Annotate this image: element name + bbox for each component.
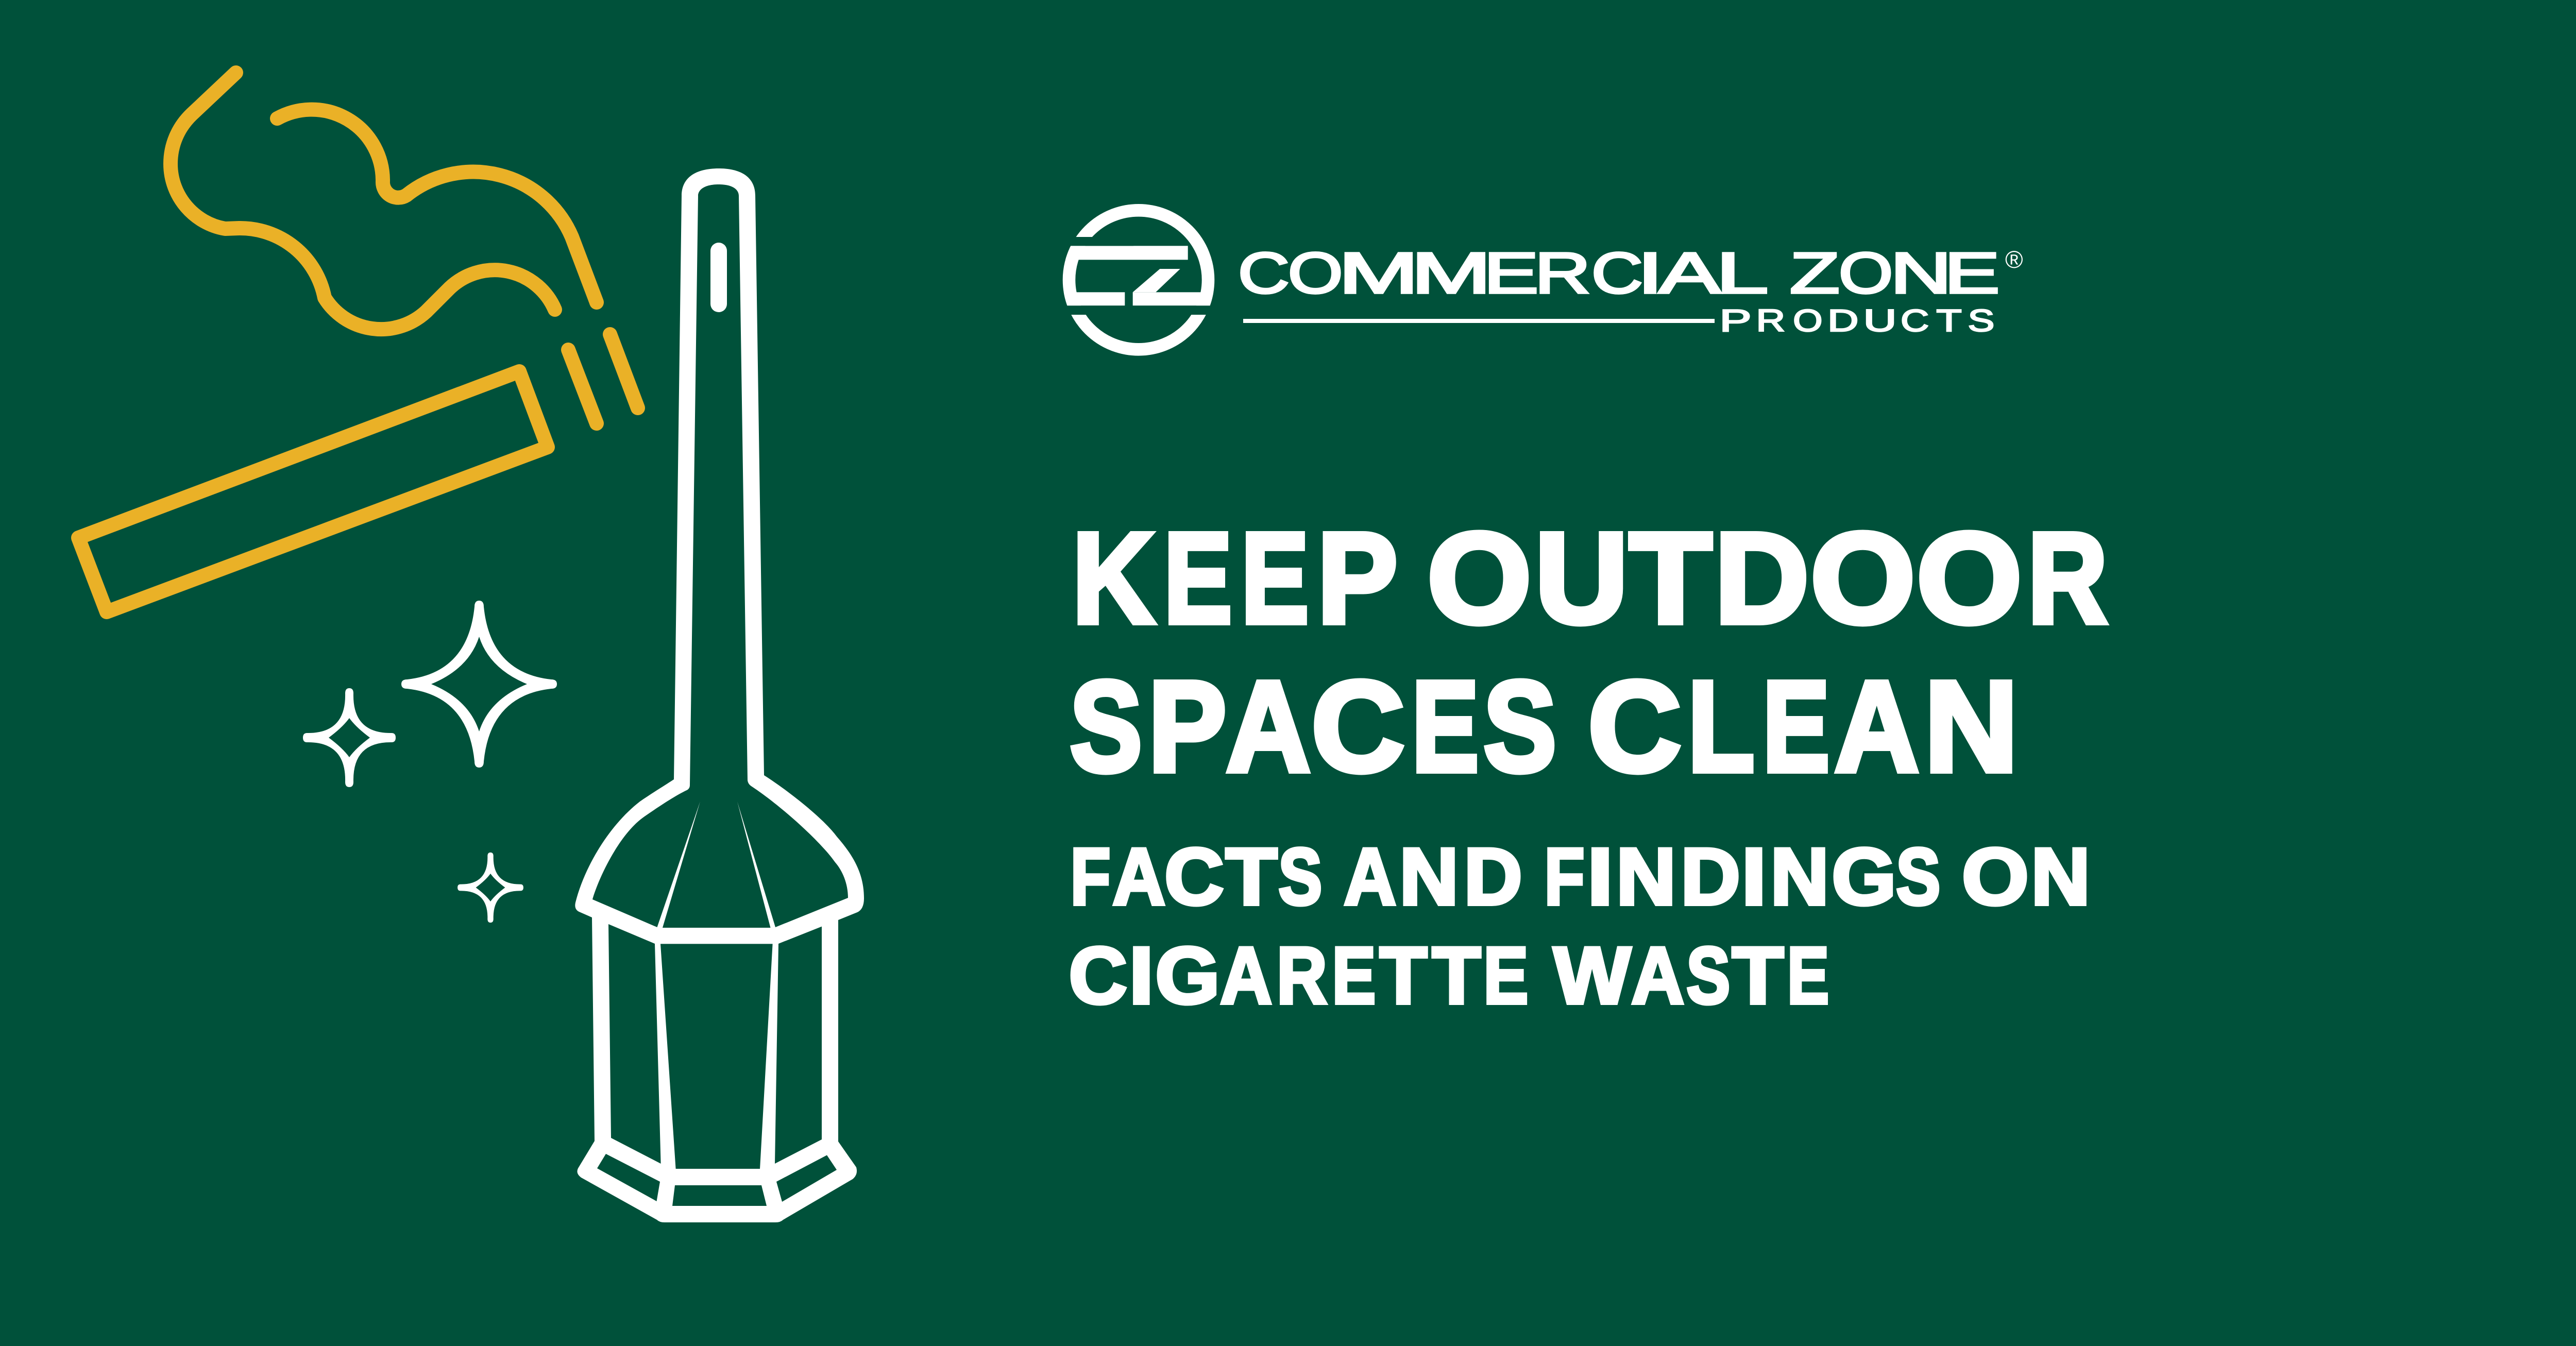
subtitle line 1: C xyxy=(1164,832,1224,922)
subtitle line 1: D xyxy=(1681,832,1740,922)
logo wordmark: N xyxy=(1890,241,1952,305)
title line 1: O xyxy=(1917,506,2022,650)
title line 1: O xyxy=(1427,506,1531,650)
icon: small sparkle xyxy=(457,853,523,923)
subtitle line 1: I xyxy=(1741,832,1766,922)
logo rule xyxy=(1243,319,1715,323)
title xyxy=(1070,506,2107,798)
subtitle xyxy=(1069,832,2090,1021)
title line 2: P xyxy=(1148,654,1226,798)
logo tagline: O xyxy=(1793,303,1823,338)
logo wordmark: O xyxy=(1839,241,1893,305)
subtitle line 1: F xyxy=(1545,832,1585,922)
title line 1: K xyxy=(1073,506,1154,650)
title line 2: N xyxy=(1924,654,2018,798)
title line 2: C xyxy=(1312,654,1404,798)
subtitle line 1: S xyxy=(1896,832,1940,922)
subtitle line 1: T xyxy=(1226,832,1277,922)
logo tagline: S xyxy=(1968,303,1994,338)
title line 1: P xyxy=(1317,506,1395,650)
subtitle line 1: N xyxy=(1616,832,1676,922)
subtitle line 2: E xyxy=(1787,931,1829,1021)
title line 2: S xyxy=(1484,654,1556,798)
subtitle line 2: G xyxy=(1155,931,1220,1021)
logo tagline: T xyxy=(1936,303,1962,338)
title line 2: E xyxy=(1412,654,1479,798)
ember line left xyxy=(568,350,597,423)
subtitle line 2: A xyxy=(1220,931,1272,1021)
title line 1: O xyxy=(1810,506,1915,650)
subtitle line 1: A xyxy=(1113,832,1165,922)
subtitle line 2: T xyxy=(1732,931,1784,1021)
subtitle line 2: W xyxy=(1554,931,1631,1021)
title line 1: T xyxy=(1630,506,1711,650)
subtitle line 1: N xyxy=(1399,832,1459,922)
icon: outdoor cigarette receptacle xyxy=(575,168,864,1222)
title line 1: E xyxy=(1164,506,1232,650)
title line 2: A xyxy=(1835,654,1919,798)
subtitle line 2: C xyxy=(1069,931,1127,1021)
icon: medium sparkle xyxy=(303,688,396,787)
logo tagline: R xyxy=(1756,303,1785,338)
logo wordmark: L xyxy=(1716,241,1766,305)
registered mark: ® xyxy=(2005,246,2023,273)
subtitle line 1: N xyxy=(2031,832,2090,922)
logo wordmark: R xyxy=(1535,241,1590,305)
subtitle line 1: F xyxy=(1071,832,1111,922)
subtitle line 2: I xyxy=(1129,931,1154,1021)
subtitle line 2: T xyxy=(1380,931,1427,1021)
title line 2: L xyxy=(1688,654,1754,798)
subtitle line 1: I xyxy=(1587,832,1613,922)
subtitle line 1: S xyxy=(1278,832,1322,922)
logo tagline: C xyxy=(1901,303,1929,338)
subtitle line 2: E xyxy=(1483,931,1528,1021)
subtitle line 2: T xyxy=(1432,931,1481,1021)
title line 2: E xyxy=(1762,654,1829,798)
title line 1: R xyxy=(2028,506,2107,650)
title line 1: U xyxy=(1535,506,1628,650)
logo wordmark: Z xyxy=(1790,241,1840,305)
smoke trail lower xyxy=(171,73,555,329)
title line 2: S xyxy=(1070,654,1142,798)
cigarette body xyxy=(78,371,548,612)
subtitle line 1: A xyxy=(1344,832,1396,922)
title line 2: C xyxy=(1588,654,1681,798)
logo wordmark: E xyxy=(1944,241,2000,305)
logo wordmark: C xyxy=(1591,241,1643,305)
logo: Commercial Zone Products xyxy=(1056,210,2023,349)
logo mark: CZ roundel xyxy=(1056,210,1221,349)
title line 2: A xyxy=(1226,654,1311,798)
icon: smoking cigarette xyxy=(78,73,638,612)
ember line right xyxy=(610,334,638,408)
logo wordmark: E xyxy=(1484,241,1538,305)
subtitle line 2: R xyxy=(1277,931,1327,1021)
receptacle slot xyxy=(710,243,727,312)
logo wordmark: M xyxy=(1338,241,1419,305)
subtitle line 2: A xyxy=(1631,931,1684,1021)
title line 1: E xyxy=(1241,506,1309,650)
logo wordmark: I xyxy=(1637,241,1663,305)
logo tagline: U xyxy=(1863,303,1896,338)
logo tagline: P xyxy=(1720,303,1752,338)
subtitle line 2: S xyxy=(1686,931,1730,1021)
subtitle line 2: E xyxy=(1332,931,1376,1021)
logo wordmark: C xyxy=(1238,241,1290,305)
logo tagline: D xyxy=(1827,303,1859,338)
logo wordmark: A xyxy=(1659,241,1721,305)
title line 1: D xyxy=(1715,506,1809,650)
logo wordmark: M xyxy=(1411,241,1492,305)
subtitle line 1: N xyxy=(1770,832,1829,922)
subtitle line 1: D xyxy=(1464,832,1522,922)
subtitle line 1: G xyxy=(1832,832,1896,922)
icon: large sparkle xyxy=(401,601,557,768)
smoke trail upper xyxy=(277,110,597,302)
logo wordmark: O xyxy=(1288,241,1343,305)
subtitle line 1: O xyxy=(1962,832,2029,922)
